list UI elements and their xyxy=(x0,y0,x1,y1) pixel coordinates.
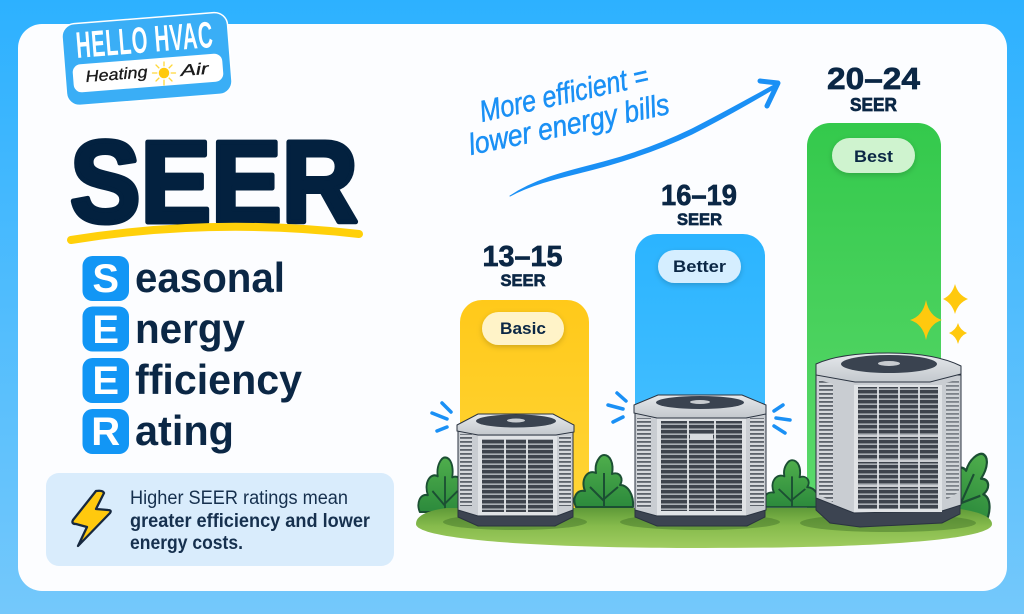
row: Efficiency: E xyxy=(92,359,119,403)
label: 13-15 SEER xyxy=(482,241,562,290)
logo sun icon xyxy=(152,62,176,85)
bar: best xyxy=(807,123,941,510)
bushes xyxy=(418,441,1011,524)
label: 16-19 SEER: SEER xyxy=(677,210,722,229)
callout text: greater efficiency and lower xyxy=(130,511,371,532)
sparkles xyxy=(910,284,968,344)
AC unit: better xyxy=(634,395,766,526)
row: Seasonal: easonal xyxy=(135,254,285,301)
pill: Better: Better xyxy=(673,257,726,276)
sound ticks left of better unit xyxy=(608,393,626,422)
callout text: Higher SEER ratings mean xyxy=(130,488,348,509)
row: Rating: R xyxy=(91,410,120,454)
sound ticks left of basic unit xyxy=(432,403,451,431)
label: 16-19 SEER xyxy=(661,180,737,229)
acronym list xyxy=(82,254,303,454)
pill: Better xyxy=(658,250,741,283)
row: Efficiency: fficiency xyxy=(135,356,303,403)
label: 20-24 SEER xyxy=(827,61,921,115)
pill: Best xyxy=(832,138,915,173)
yellow underline xyxy=(71,227,359,240)
bush: center left xyxy=(574,455,633,507)
logo tagline air: Air xyxy=(179,61,210,80)
label: 20-24 SEER: SEER xyxy=(850,95,897,115)
bush: far right xyxy=(929,441,1011,524)
pill: Best: Best xyxy=(854,147,893,166)
logo: Hello HVAC xyxy=(61,12,233,106)
title: SEER: SEER xyxy=(70,117,358,247)
logo tagline pill xyxy=(72,53,224,93)
label: 20-24 SEER: 20–24 xyxy=(827,61,921,96)
bar: better xyxy=(635,234,765,510)
row: Rating xyxy=(82,407,234,454)
callout text xyxy=(130,488,371,554)
row: Rating: ating xyxy=(135,407,234,454)
row: Energy xyxy=(82,305,246,352)
AC unit: basic xyxy=(457,414,574,526)
sound ticks right of better unit xyxy=(774,405,790,433)
label: 16-19 SEER: 16–19 xyxy=(661,180,737,212)
grass ground xyxy=(416,508,992,548)
handwritten note: More efficient = xyxy=(476,59,651,129)
bar: basic xyxy=(460,300,589,510)
logo tagline heating: Heating xyxy=(85,64,148,86)
row: Energy: E xyxy=(92,308,119,352)
logo name: HELLO HVAC xyxy=(74,15,214,67)
arrow: rising efficiency xyxy=(510,81,778,196)
unit shadows on grass xyxy=(443,514,976,532)
row: Seasonal: S xyxy=(92,257,119,301)
AC unit: best xyxy=(816,353,961,527)
icon: lightning bolt xyxy=(72,491,111,546)
label: 13-15 SEER: 13–15 xyxy=(482,241,562,273)
bush: center right xyxy=(764,460,820,507)
callout panel xyxy=(46,473,394,566)
bush: far left xyxy=(418,457,471,512)
pill: Basic: Basic xyxy=(500,319,546,338)
row: Energy: nergy xyxy=(135,305,246,352)
callout text: energy costs. xyxy=(130,533,243,554)
pill: Basic xyxy=(482,312,564,345)
handwritten note: lower energy bills xyxy=(466,88,672,162)
label: 13-15 SEER: SEER xyxy=(500,271,546,290)
